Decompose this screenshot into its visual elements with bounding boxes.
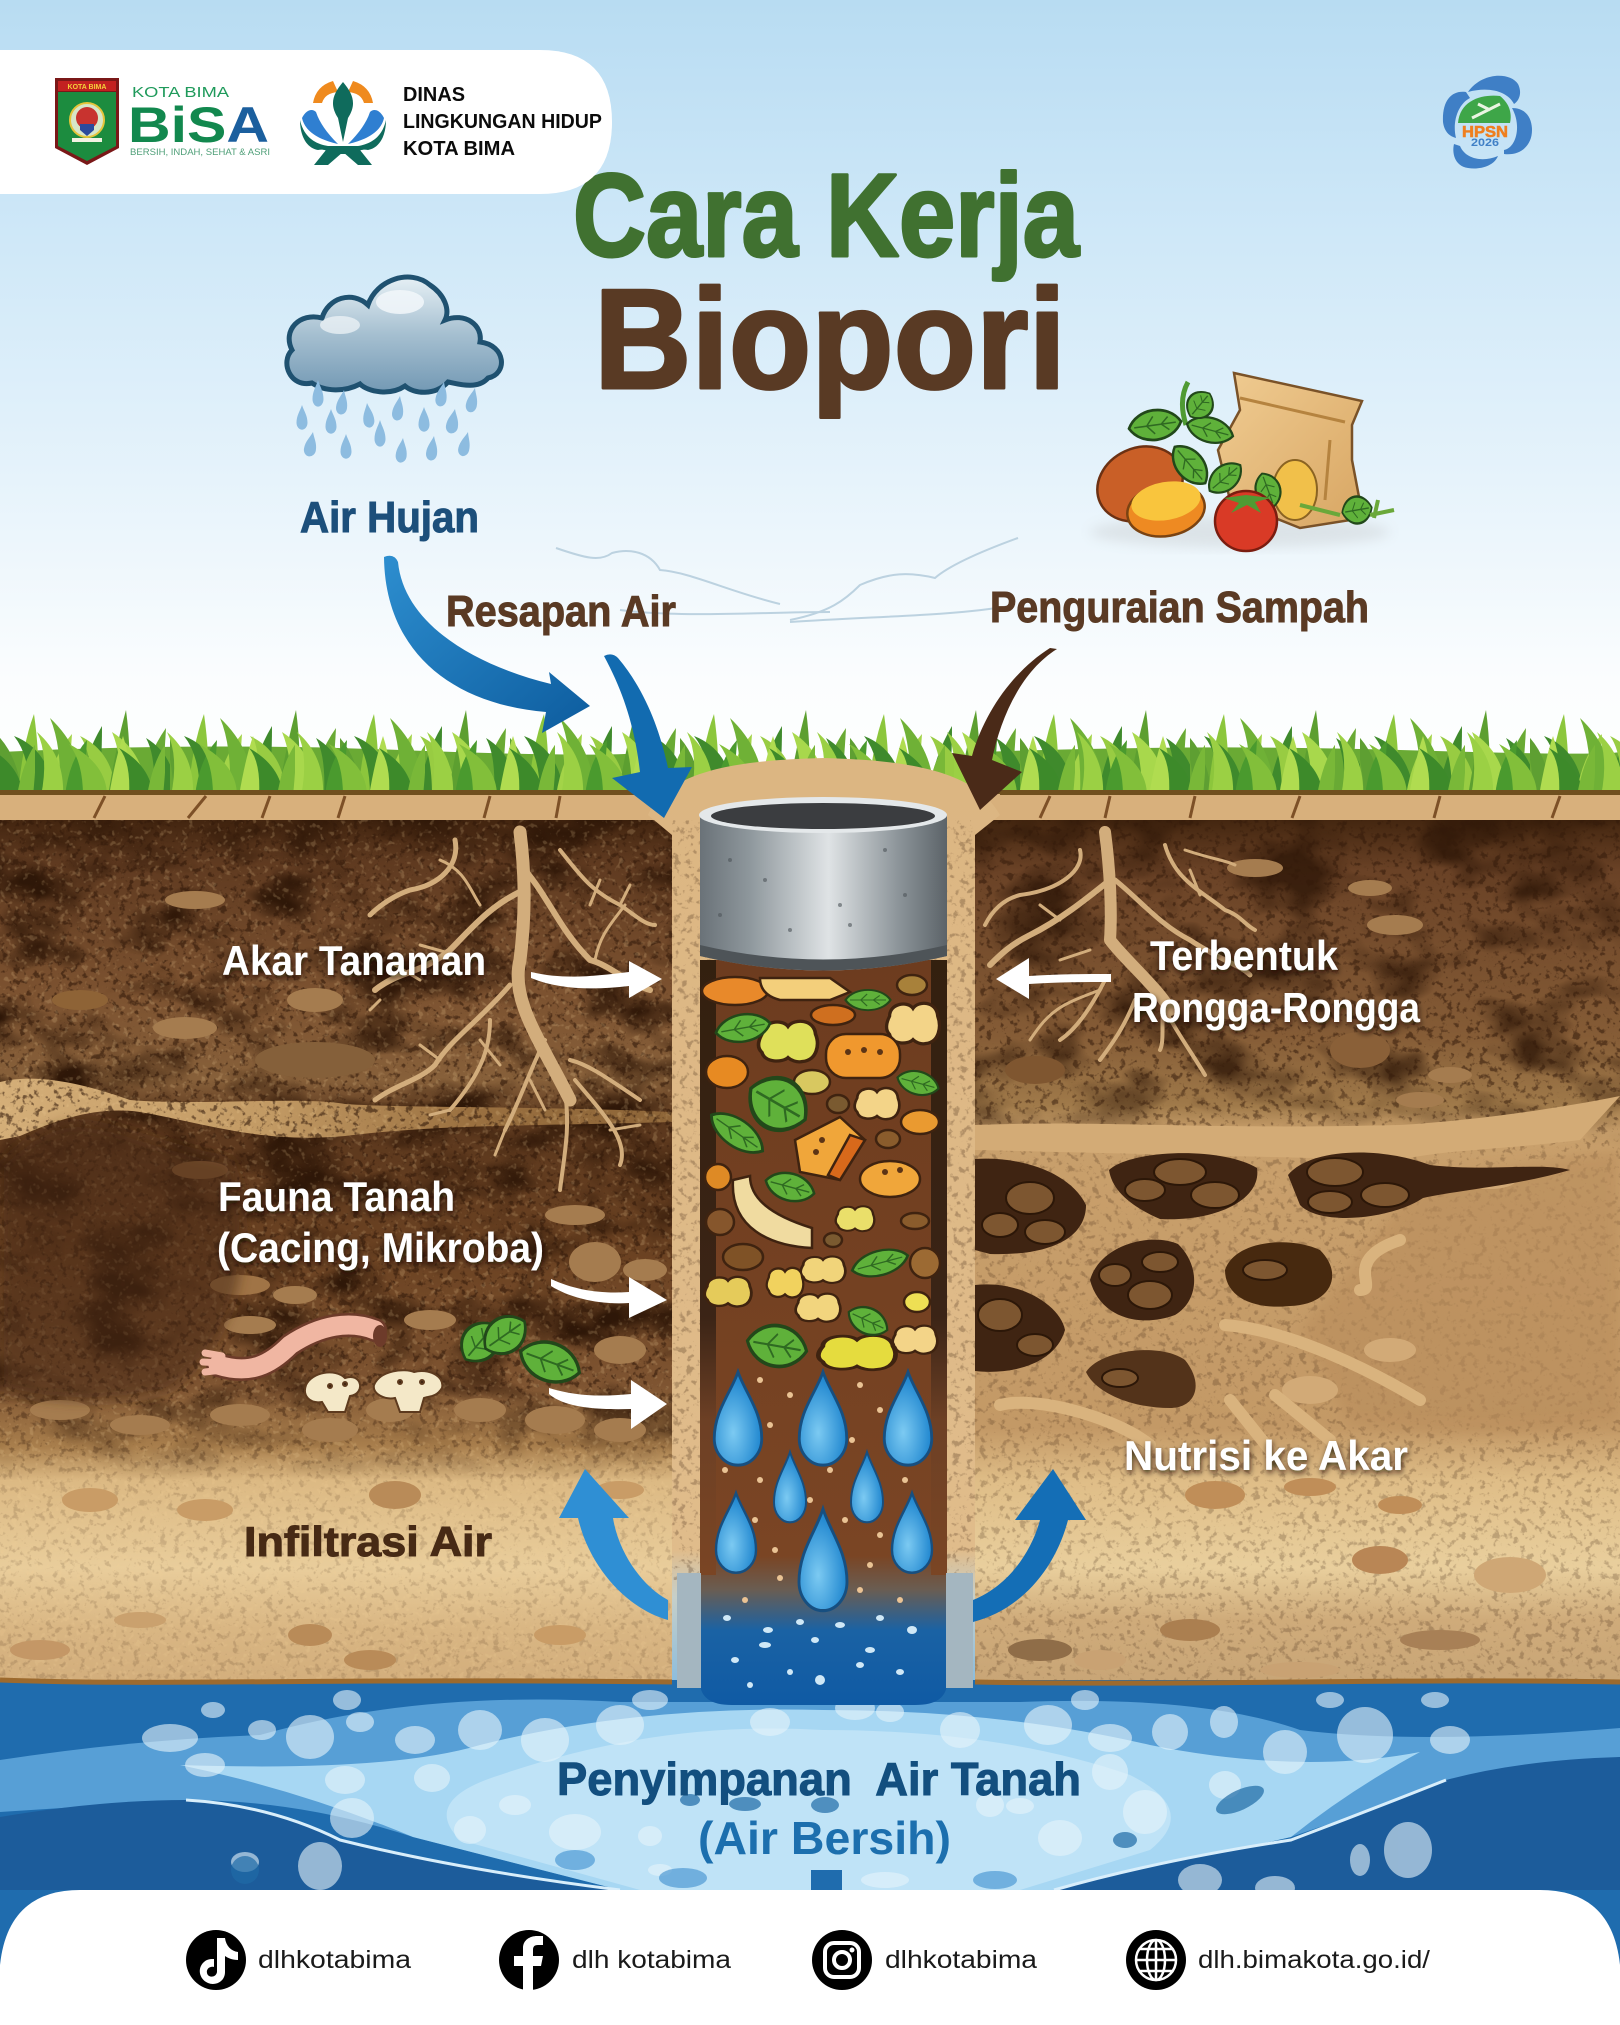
logo: HPSN 2026 <box>1443 76 1532 168</box>
social: instagram <box>812 1930 1037 1990</box>
logo: kota bima shield <box>55 78 119 165</box>
biscuit and box holes <box>813 1047 903 1175</box>
left soil: tan band between layers <box>0 1079 672 1140</box>
logo: dinas lingkungan hidup <box>300 81 386 165</box>
pipe tube with fill <box>700 960 947 1705</box>
social: website: dlh.bimakota.go.id/ <box>1198 1946 1430 1974</box>
sand top band with blocks <box>0 790 1620 820</box>
organic waste in pipe <box>702 975 940 1370</box>
arrow: fauna to pipe <box>551 1277 667 1318</box>
pale specks in lower fill <box>718 1377 927 1603</box>
water drops in pipe <box>714 1372 932 1611</box>
label: groundwater storage <box>557 1753 1081 1864</box>
logo: HPSN 2026: 2026 <box>1471 137 1499 149</box>
header text: DINAS <box>403 84 465 106</box>
social: website <box>1126 1930 1430 1990</box>
groundwater <box>0 1680 1620 2025</box>
arrow: rain to soil <box>384 556 590 733</box>
dark cave on left soil <box>0 1123 244 1402</box>
soil cross-section: right <box>975 794 1620 1684</box>
label: penguraian sampah: Penguraian Sampah <box>990 583 1369 632</box>
footer panel <box>0 1890 1620 2025</box>
social: instagram: dlhkotabima <box>885 1946 1037 1974</box>
label: terbentuk rongga-rongga: Terbentuk <box>1150 932 1339 979</box>
soil-water boundary <box>0 1680 1620 1683</box>
right soil: tan subsoil patch <box>1300 1150 1620 1432</box>
header panel <box>0 50 612 194</box>
label: air hujan: Air Hujan <box>300 493 479 542</box>
label: groundwater storage: (Air Bersih) <box>698 1812 951 1864</box>
title: Cara Kerja <box>573 150 1080 282</box>
light root veins beneath cavities <box>1000 1240 1420 1450</box>
arrow: absorption <box>604 654 692 818</box>
faint cloud outlines <box>556 538 1018 622</box>
bubbles in pipe water <box>723 1615 917 1688</box>
background: sky <box>0 0 1620 800</box>
microbes <box>305 1370 442 1412</box>
social: facebook <box>499 1930 731 1990</box>
tomato <box>1215 491 1277 551</box>
soil cavities: right <box>975 1152 1570 1450</box>
pebbles: right soil <box>1005 859 1546 1678</box>
label: fauna tanah: Fauna Tanah <box>218 1173 455 1220</box>
arrow: rongga to pipe <box>996 958 1111 999</box>
dark pebbles in water <box>231 1780 1268 1889</box>
title <box>573 150 1080 419</box>
header text: KOTA BIMA <box>403 138 515 160</box>
leaves near worm <box>452 1307 586 1390</box>
logo: HPSN 2026: HPSN <box>1462 124 1508 141</box>
label: infiltrasi air: Infiltrasi Air <box>244 1518 492 1565</box>
label: fauna tanah: (Cacing, Mikroba) <box>217 1224 544 1271</box>
icon: organic waste pile <box>1085 373 1394 551</box>
leaves mid <box>1164 438 1248 500</box>
arrow: waste decomposition <box>952 648 1057 810</box>
arrow stub above footer <box>811 1870 842 1892</box>
social: tiktok: dlhkotabima <box>258 1946 411 1974</box>
logo: kota bima BiSA: BERSIH, INDAH, SEHAT & ASRI <box>130 147 270 157</box>
label: nutrisi ke akar: Nutrisi ke Akar <box>1124 1432 1408 1479</box>
arrow: leaves to pipe <box>549 1380 667 1429</box>
arrow: infiltration left <box>559 1469 668 1620</box>
roots: right <box>985 832 1255 1075</box>
grass strip <box>0 706 1620 796</box>
label: terbentuk rongga-rongga: Rongga-Rongga <box>1132 984 1421 1031</box>
social: tiktok <box>186 1930 411 1990</box>
label: akar tanaman: Akar Tanaman <box>222 937 486 984</box>
label: groundwater storage: Penyimpanan Air Tanah <box>557 1753 1081 1805</box>
tube walls <box>700 960 947 1575</box>
deep water hills <box>0 1800 620 1890</box>
hole collar around pipe <box>648 758 1000 1690</box>
label: terbentuk rongga-rongga <box>1132 932 1421 1031</box>
logo: kota bima shield: KOTA BIMA <box>68 84 106 91</box>
leaves behind <box>1127 382 1236 448</box>
logo: kota bima BiSA: BiS A <box>128 97 269 153</box>
header text <box>403 84 602 160</box>
metal cap <box>700 815 947 970</box>
worm <box>203 1325 387 1372</box>
title: Biopori <box>594 260 1066 419</box>
orange slice <box>1123 476 1209 542</box>
social: facebook: dlh kotabima <box>572 1946 731 1974</box>
icon: rain cloud <box>287 277 501 463</box>
logo: kota bima BiSA: KOTA BIMA <box>132 84 229 101</box>
biopori pipe <box>677 797 973 1705</box>
paper bag <box>1218 373 1363 528</box>
leaves in pipe <box>704 990 941 1371</box>
label: resapan air: Resapan Air <box>446 587 676 636</box>
raindrops <box>296 380 480 463</box>
header text: LINGKUNGAN HIDUP <box>403 111 602 133</box>
right soil: pale upper cavity band <box>975 1096 1620 1160</box>
soil cross-section: left <box>0 794 672 1684</box>
arrow: akar to pipe <box>531 961 662 998</box>
arrow: infiltration right <box>973 1469 1086 1622</box>
small greens <box>1340 494 1374 526</box>
soil pebbles: left <box>10 891 667 1670</box>
label: fauna tanah <box>217 1173 544 1271</box>
mid blue water <box>0 1699 1620 1890</box>
water bubbles <box>142 1690 1470 1900</box>
potato <box>1085 433 1195 535</box>
roots: left <box>370 832 655 1190</box>
light central water <box>180 1709 1420 1890</box>
